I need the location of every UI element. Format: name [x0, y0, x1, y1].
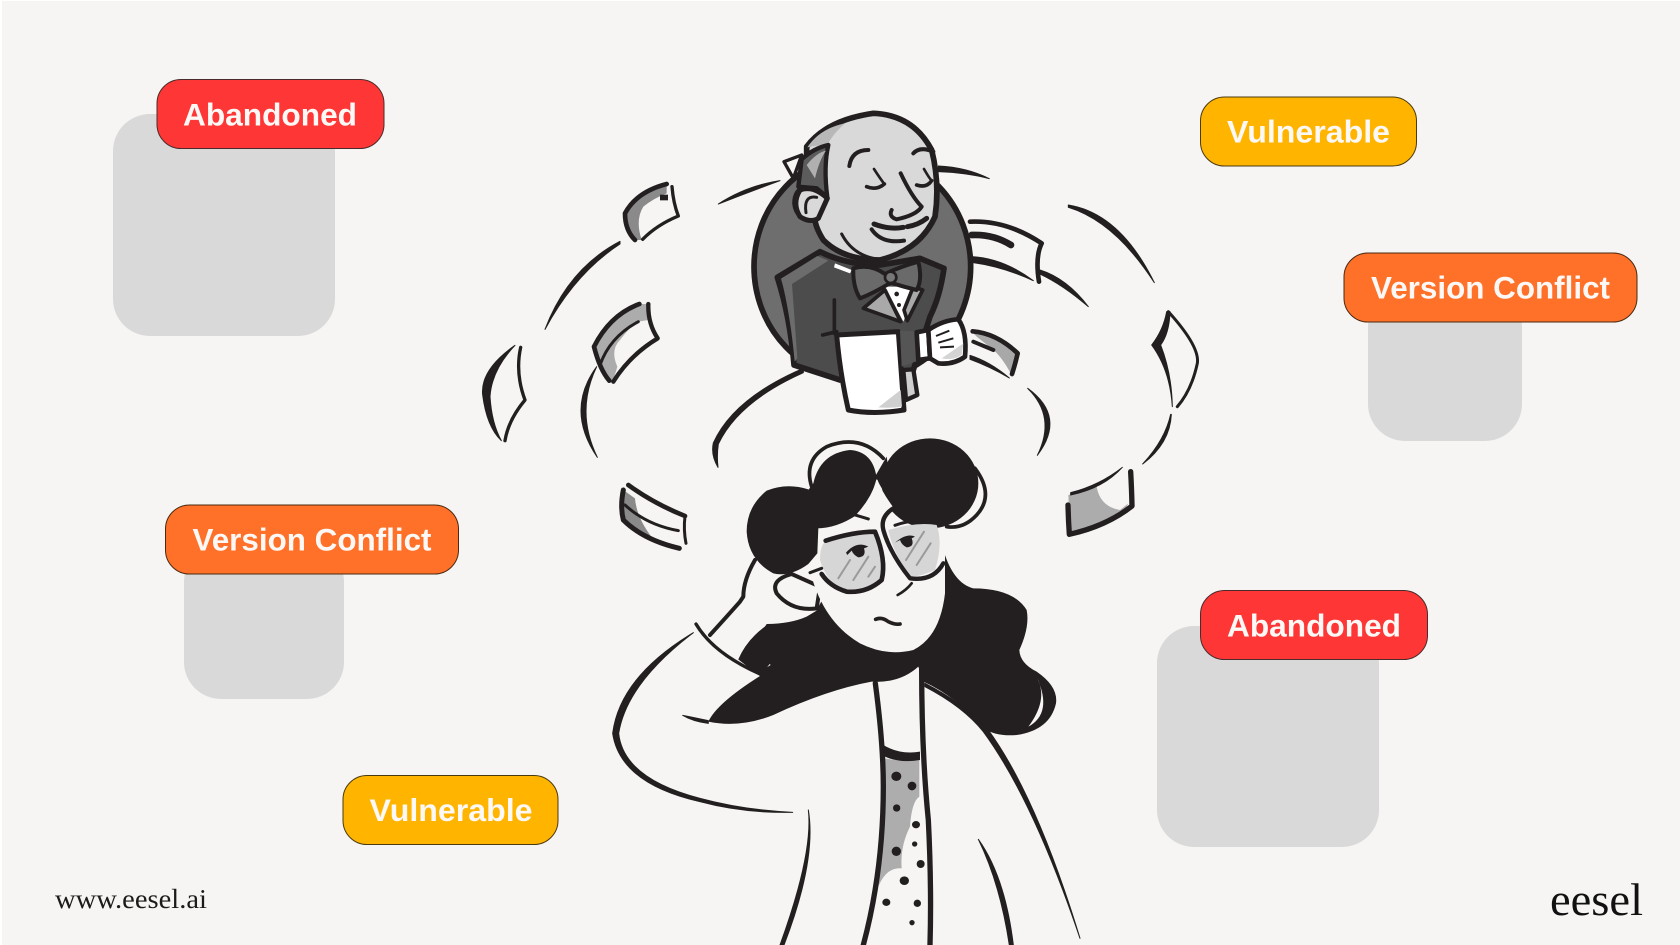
coat outline — [613, 624, 1080, 945]
wrist and ear — [710, 560, 820, 659]
shirt and lapels — [863, 287, 923, 322]
badge: Abandoned top left: Abandoned — [183, 96, 357, 132]
small gray paper — [970, 331, 1018, 378]
hand shadow wedge — [738, 611, 817, 676]
hair edge crescent — [1028, 678, 1043, 727]
swirl line — [545, 241, 620, 329]
paper flying right — [970, 222, 1088, 307]
illustration: Jenkins butler — [713, 113, 1088, 467]
swirl lines around butler — [713, 166, 989, 467]
towel — [837, 332, 904, 412]
paper: bottom — [622, 485, 686, 548]
badge: Vulnerable top right — [1200, 97, 1416, 166]
hair buns — [747, 438, 985, 574]
eyes and brows — [846, 515, 920, 557]
paper: far left — [482, 345, 525, 441]
card: right placeholder — [1368, 290, 1522, 441]
badge: Version Conflict right — [1344, 253, 1637, 322]
patterned shirt — [863, 668, 931, 945]
sleeve — [900, 331, 920, 367]
footer: website url: www.eesel.ai — [55, 884, 207, 914]
flowing hair and shawl — [708, 520, 1056, 735]
badge: Vulnerable bottom left — [343, 776, 558, 844]
nose and mouth — [876, 583, 912, 624]
bow tie — [853, 262, 920, 298]
ear — [796, 189, 827, 220]
head — [795, 113, 937, 260]
jacket lighter edge band — [781, 256, 828, 362]
paper: top — [625, 184, 678, 240]
swirl line — [581, 367, 597, 457]
swirl line — [1143, 414, 1171, 464]
hair — [784, 123, 845, 197]
swirl line — [1068, 205, 1154, 283]
face — [808, 478, 945, 652]
facial features — [842, 149, 933, 259]
hand with cuff — [917, 319, 965, 364]
badge: Version Conflict left: Version Conflict — [192, 522, 432, 558]
badge: Version Conflict left — [166, 505, 458, 574]
paper: lower right — [1068, 467, 1132, 534]
illustration: swirling papers left — [482, 184, 686, 548]
glasses — [810, 508, 943, 592]
round badge background — [754, 153, 971, 380]
paper: far right — [1152, 312, 1198, 407]
badge: Abandoned top left — [157, 80, 384, 148]
badge: Abandoned bottom right — [1200, 590, 1428, 660]
jacket — [777, 252, 944, 380]
collar — [834, 263, 852, 273]
card: bottom right placeholder — [1157, 626, 1379, 847]
illustration: swirling papers right — [1028, 205, 1198, 534]
badge: Vulnerable bottom left: Vulnerable — [370, 792, 532, 828]
paper: middle — [594, 304, 658, 382]
towel fold — [903, 369, 917, 400]
badge: Abandoned bottom right: Abandoned — [1227, 608, 1401, 644]
footer: eesel logo: eesel — [1550, 874, 1643, 925]
card: top left placeholder — [113, 114, 335, 336]
card: left placeholder — [184, 545, 344, 699]
badge: Version Conflict right: Version Conflict — [1371, 270, 1610, 306]
badge: Vulnerable top right: Vulnerable — [1227, 114, 1390, 150]
swirl line — [1028, 388, 1050, 455]
sleeve stripe — [747, 645, 771, 669]
illustration: confused woman — [613, 438, 1080, 945]
